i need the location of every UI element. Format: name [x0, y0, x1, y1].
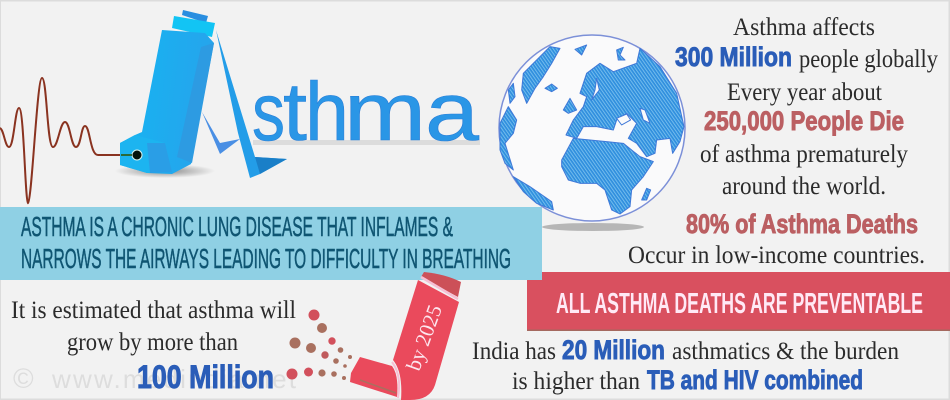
- text block: India statistics: asthmatics & the burden: [672, 338, 899, 365]
- text block: global statistics: people globally: [799, 46, 938, 73]
- icon: heartbeat line: [0, 78, 133, 203]
- text block: growth estimate: It is estimated that asthma will: [11, 297, 296, 324]
- title: sthma: h: [305, 65, 349, 158]
- title: sthma: m: [344, 65, 426, 158]
- panel: blue definition banner: ASTHMA IS A CHRONIC LUNG DISEASE THAT INFLAMES &: [21, 211, 453, 242]
- watermark: ©: [13, 363, 34, 394]
- text block: India statistics: 20 Million: [562, 335, 665, 365]
- title: sthma: t: [283, 65, 307, 158]
- icon: red inhaler by 2025: by 2025: [401, 302, 447, 374]
- text block: India statistics: [472, 335, 899, 395]
- panel: blue definition banner: NARROWS THE AIRWAYS LEADING TO DIFFICULTY IN BREATHING: [21, 243, 511, 274]
- text block: global statistics: Every year about: [727, 79, 882, 106]
- title: sthma: s: [252, 65, 285, 158]
- icon: blue inhaler forming letter A: [115, 10, 287, 178]
- watermark: www.medindia.net: [51, 364, 297, 394]
- panel: blue definition banner: [0, 207, 542, 280]
- text block: global statistics: around the world.: [722, 173, 886, 200]
- icon: spray dots: [286, 310, 352, 380]
- text block: global statistics: Asthma affects: [733, 14, 875, 41]
- text block: global statistics: Occur in low-income countries.: [628, 242, 925, 269]
- panel: red preventable banner: [527, 272, 950, 331]
- text block: India statistics: TB and HIV combined: [647, 365, 863, 395]
- title: sthma: a: [425, 65, 480, 158]
- text block: global statistics: 250,000 People Die: [704, 106, 904, 136]
- title: sthma: [252, 65, 480, 158]
- icon: hatched globe: [499, 35, 685, 231]
- text block: India statistics: India has: [472, 338, 556, 365]
- text block: global statistics: [628, 14, 938, 269]
- text block: India statistics: is higher than: [512, 368, 640, 395]
- text block: global statistics: 300 Million: [675, 42, 792, 72]
- text block: global statistics: of asthma prematurely: [700, 141, 908, 168]
- text block: growth estimate: [11, 297, 296, 395]
- icon: red inhaler by 2025: [350, 272, 461, 400]
- text block: growth estimate: grow by more than: [67, 329, 238, 356]
- text block: growth estimate: 100 Million: [137, 359, 274, 395]
